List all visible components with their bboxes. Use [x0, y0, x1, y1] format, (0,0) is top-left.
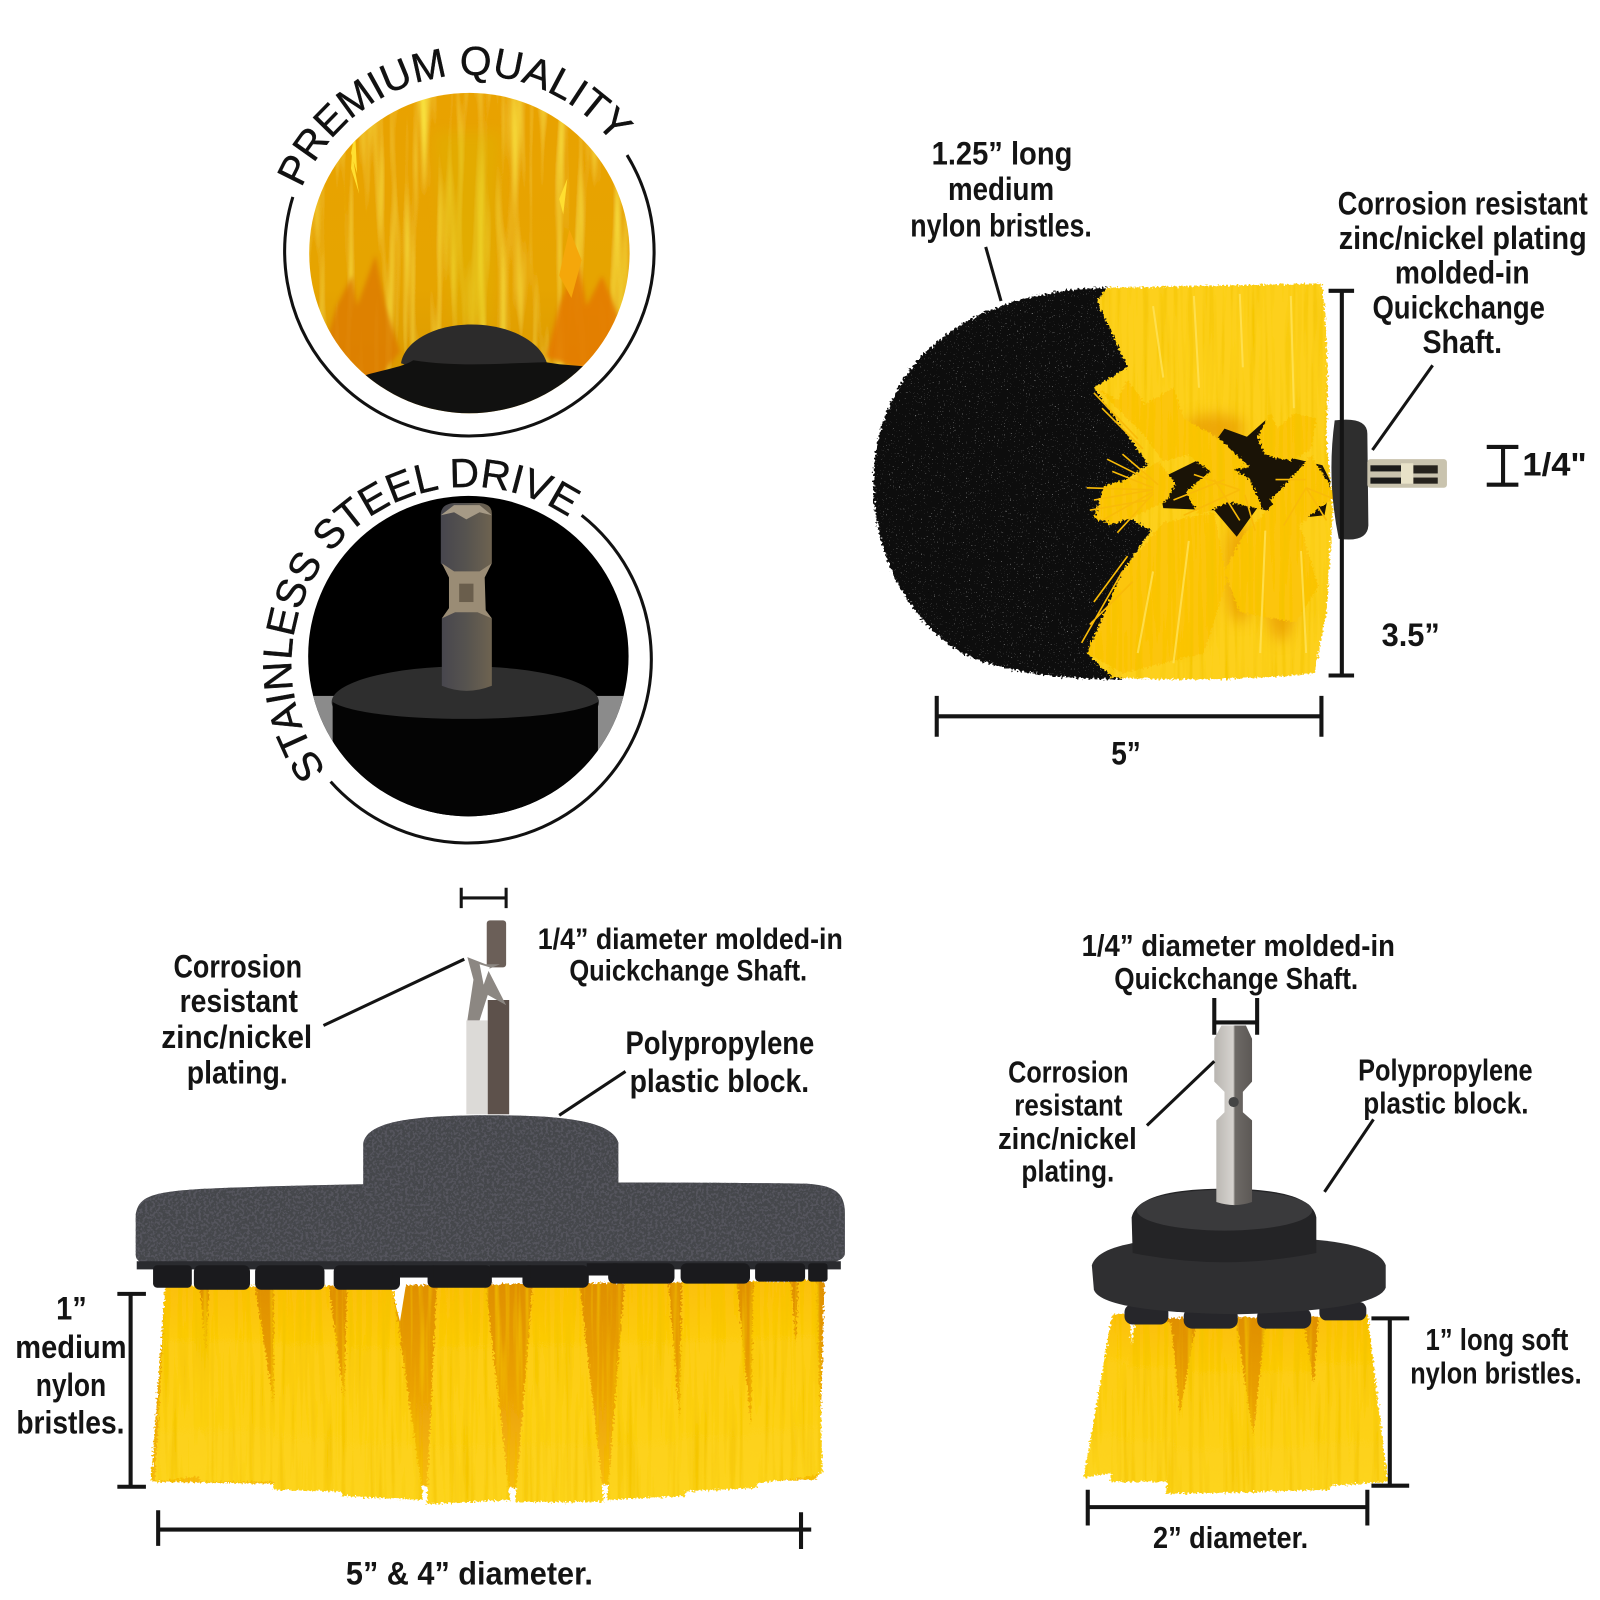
back bristles: [151, 1281, 824, 1488]
callout: large brush shaft diameter: Quickchange Shaft.: [569, 955, 807, 988]
lower disc: [136, 1182, 845, 1269]
callout: large brush plating: zinc/nickel: [161, 1018, 312, 1055]
badge: stainless steel drive: [262, 458, 653, 844]
upper hub: [363, 1115, 618, 1189]
dimension: ball brush shaft 1/4 in: 1/4": [1522, 446, 1587, 483]
dimension: large brush bristle length: bristles.: [16, 1404, 124, 1441]
badge heading: stainless steel drive: STAINLESS STEEL DRIVE: [262, 458, 582, 781]
product: small flat brush: [1084, 1026, 1388, 1494]
callout: large brush plastic block: plastic block.: [630, 1062, 809, 1099]
callout: ball brush shaft plating: Quickchange: [1372, 288, 1545, 325]
bristle mounts: [137, 1261, 841, 1290]
dimension: large brush diameter: 5” & 4” diameter.: [346, 1555, 593, 1592]
dark core between tufts: [1158, 420, 1331, 537]
callout: small brush plating: zinc/nickel: [998, 1122, 1137, 1156]
black domed bristles: [873, 288, 1173, 680]
dimension: small brush diameter: 2” diameter.: [1153, 1521, 1308, 1555]
callout: ball brush bristle length: 1.25” long: [932, 134, 1072, 171]
lower disc: [1092, 1237, 1386, 1314]
callout: small brush shaft diameter: Quickchange Shaft.: [1114, 962, 1358, 996]
callout: ball brush shaft plating: molded-in: [1395, 254, 1530, 291]
quick-change shaft: [1367, 459, 1447, 488]
callout: ball brush shaft plating: Shaft.: [1422, 323, 1502, 360]
dimension: large brush bristle length: medium: [15, 1328, 127, 1365]
gap highlight: [390, 1284, 406, 1321]
hub top face: [1137, 1190, 1312, 1231]
dimension: ball brush shaft 1/4 in: [1487, 446, 1587, 485]
dimension: large brush diameter: [158, 1510, 811, 1592]
callout: ball brush shaft plating: [1338, 184, 1588, 450]
shaft: [466, 920, 509, 1114]
callout: large brush shaft diameter: [461, 888, 843, 988]
callout: large brush plating: plating.: [187, 1054, 288, 1091]
badge heading: premium quality: PREMIUM QUALITY: [277, 46, 634, 186]
grey hub: [1331, 420, 1368, 540]
callout: small brush plastic block: Polypropylene: [1358, 1054, 1533, 1088]
callout: small brush plastic block: plastic block.: [1363, 1086, 1529, 1120]
badge ring: [331, 515, 651, 843]
callout: small brush shaft diameter: 1/4” diameter molded-in: [1082, 929, 1395, 963]
callout: small brush plastic block: [1324, 1054, 1533, 1192]
bright fibre highlights: [1138, 294, 1306, 663]
product: ball brush: [873, 284, 1447, 680]
dimension: large brush bristle length: 1”: [56, 1289, 87, 1326]
front tufts: [1084, 1314, 1388, 1494]
callout: small brush plating: [998, 1056, 1214, 1189]
dimension: ball brush length 5 in: 5”: [1111, 734, 1141, 771]
photo: bristle close-up: [306, 90, 633, 429]
dimension: ball brush length 5 in: [937, 696, 1321, 771]
callout: ball brush bristle length: [910, 134, 1092, 301]
stray tuft fibres: [1082, 393, 1337, 643]
dimension: ball brush height 3.5 in: 3.5”: [1382, 616, 1440, 653]
photo: hex shank on hub: [306, 495, 633, 827]
callout: large brush plating: [161, 948, 464, 1091]
callout: small brush plating: Corrosion: [1008, 1056, 1129, 1090]
yellow bristle body: [1087, 284, 1333, 679]
dimension: small brush bristle length: [1371, 1318, 1582, 1486]
callout: small brush shaft diameter: [1082, 929, 1395, 1035]
callout: ball brush bristle length: nylon bristles.: [910, 207, 1092, 244]
callout: large brush plastic block: Polypropylene: [626, 1024, 814, 1061]
dimension: ball brush height 3.5 in: [1329, 291, 1440, 676]
dimension: small brush bristle length: 1” long soft: [1426, 1323, 1568, 1357]
front tufts: [155, 1280, 822, 1504]
callout: large brush plastic block: [559, 1024, 814, 1115]
callout: small brush plating: resistant: [1014, 1088, 1122, 1122]
callout: small brush plating: plating.: [1021, 1155, 1114, 1189]
back bristles: [1133, 1316, 1357, 1480]
bristle shadows: [1161, 414, 1295, 648]
callout: large brush plating: resistant: [180, 982, 298, 1019]
bristle mounts: [1124, 1302, 1366, 1329]
upper hub: [1132, 1189, 1316, 1262]
callout: large brush shaft diameter: 1/4” diameter molded-in: [538, 923, 843, 956]
dimension: large brush bristle length: [15, 1289, 146, 1487]
yellow tufts: [1087, 380, 1337, 673]
shaft: [1214, 1026, 1252, 1205]
product: large flat brush: [136, 920, 845, 1504]
callout: ball brush bristle length: medium: [948, 170, 1054, 207]
dimension: large brush bristle length: nylon: [36, 1366, 106, 1403]
badge: premium quality: [277, 46, 656, 438]
badge ring: [285, 155, 654, 436]
callout: large brush plating: Corrosion: [173, 948, 302, 985]
dimension: small brush diameter: [1088, 1490, 1367, 1555]
